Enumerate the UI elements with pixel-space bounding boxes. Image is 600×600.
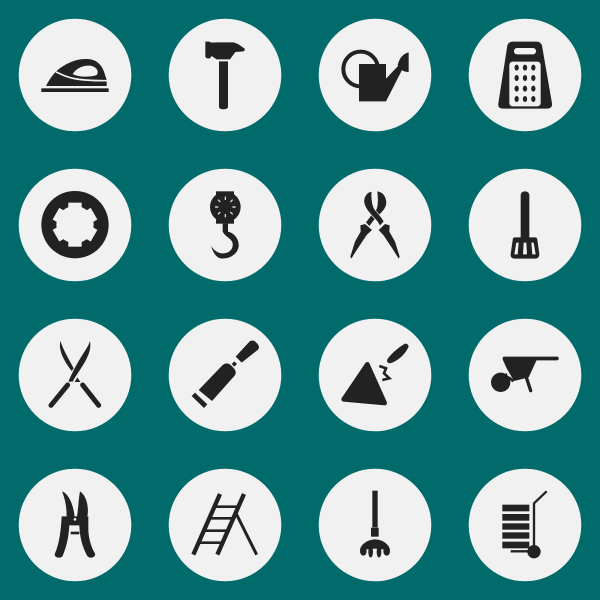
icon: gear ring [41,191,109,258]
panel: hand truck [469,469,581,581]
panel: rake [319,469,431,581]
panel: grater [469,19,581,131]
panel: hedge shears [19,319,131,431]
icon: trowel [344,344,409,403]
icon: rake [360,491,390,558]
panel: pruners [19,469,131,581]
icon: loppers [350,191,400,259]
icon: iron [41,59,109,92]
icon: hedge shears [51,341,99,405]
panel: hammer [169,19,281,131]
panel: trowel [319,319,431,431]
icon: ladder [193,494,257,555]
icon: scale hook [210,191,241,258]
icon: grater [498,42,552,109]
icon: watering can [343,52,409,101]
panel: watering can [319,19,431,131]
icon: pruners [55,491,95,558]
icon: spatula [511,191,539,259]
panel: wheelbarrow [469,319,581,431]
panel: ladder [169,469,281,581]
panel: scale hook [169,169,281,281]
icon: hammer [205,42,245,109]
icon: chisel [192,340,259,408]
panel: loppers [319,169,431,281]
panel: iron [19,19,131,131]
panel: gear ring [19,169,131,281]
icon: hand truck [502,491,547,558]
icon: wheelbarrow [491,357,559,392]
panel: spatula [469,169,581,281]
panel: chisel [169,319,281,431]
